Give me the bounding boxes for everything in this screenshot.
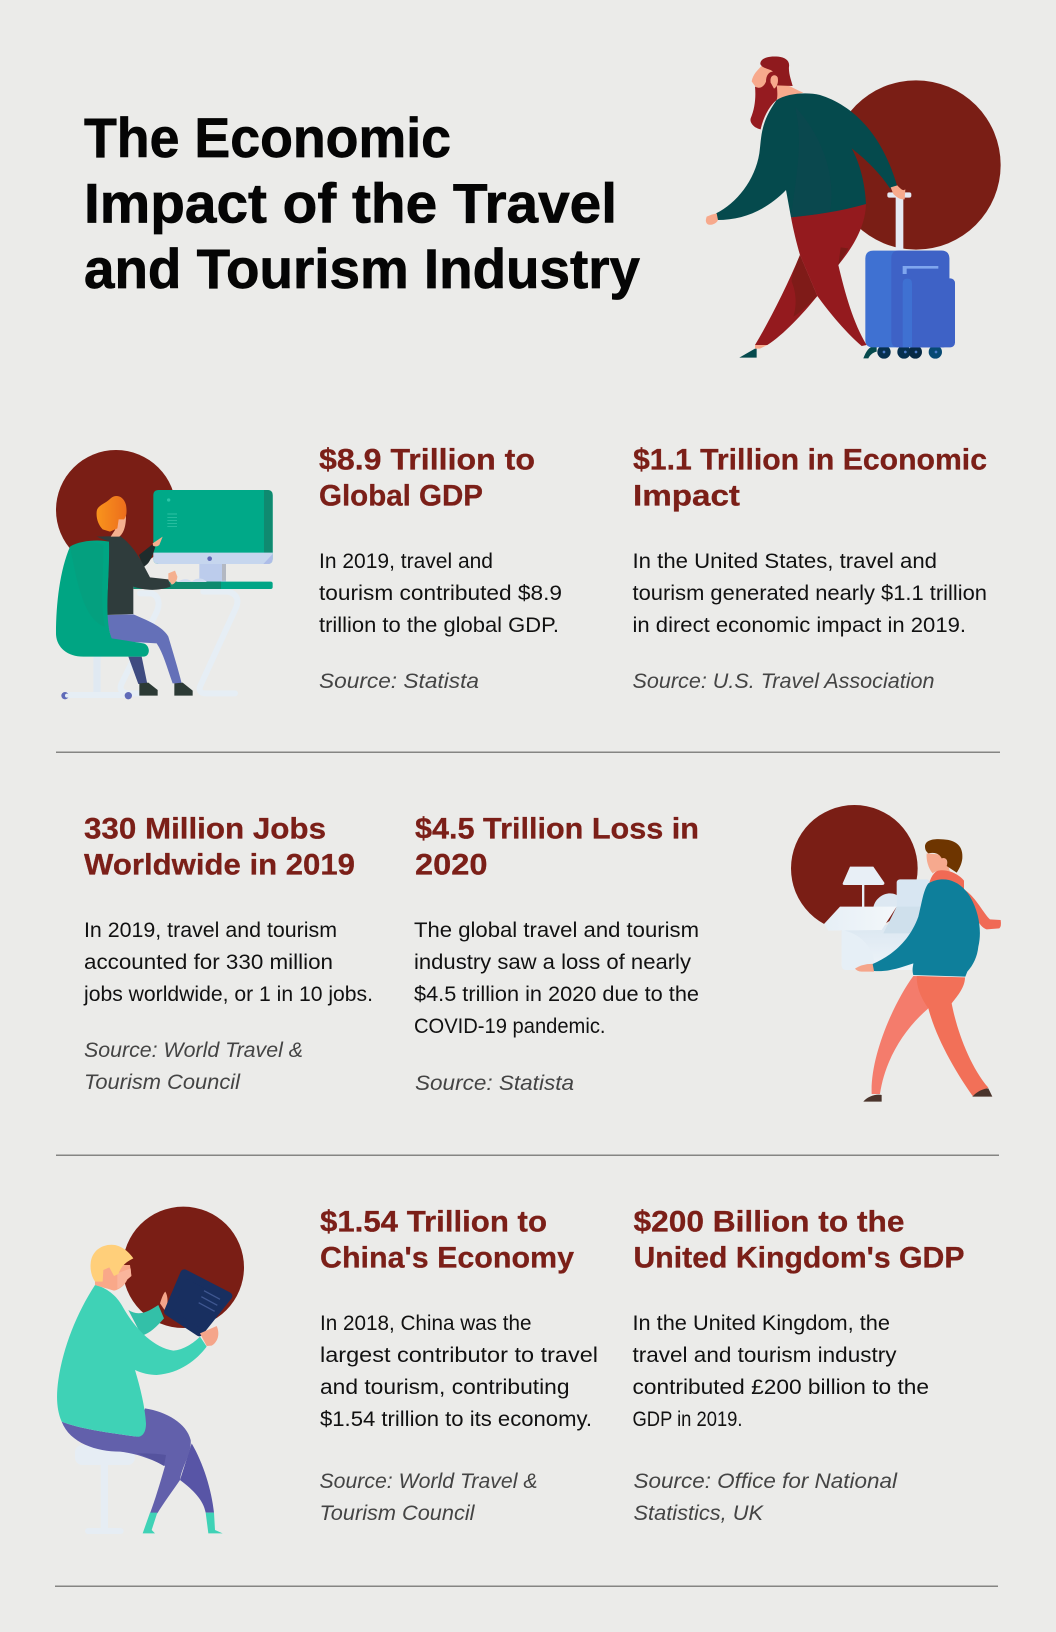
illustration: person seated with tablet [57, 1207, 244, 1534]
text block: $4.5 Trillion Loss [414, 812, 699, 1095]
text block: 330 Million Jobs: Worldwide in 2019 [84, 848, 355, 882]
text block: $8.9 Trillion [319, 444, 562, 693]
text block: $200 Billion: contributed £200 billion to the [632, 1376, 929, 1399]
text block: $1.54 Trillion: China's Economy [320, 1242, 574, 1274]
illustration: person at desktop computer [56, 450, 273, 699]
text block: 330 Million Jobs [83, 812, 373, 1094]
text block: $1.54 Trillion: Source: World Travel & [320, 1470, 538, 1493]
divider [56, 752, 1000, 753]
text block: 330 Million Jobs: In 2019, travel and tourism [84, 919, 337, 942]
text block: $200 Billion: GDP in 2019. [632, 1408, 742, 1431]
text block: $1.1 Trillion: In the United States, travel and [632, 550, 937, 573]
text block: 330 Million Jobs: 330 Million Jobs [84, 812, 326, 846]
text block: $4.5 Trillion Loss: $4.5 trillion in 2020 due to the [414, 983, 699, 1006]
text block: $8.9 Trillion: trillion to the global GDP. [319, 614, 559, 637]
text block: $1.54 Trillion: In 2018, China was the [320, 1312, 532, 1335]
text block: $1.54 Trillion: largest contributor to travel [320, 1344, 598, 1367]
text block: $1.1 Trillion [632, 444, 987, 693]
text block: $200 Billion: Source: Office for National [634, 1470, 898, 1493]
text block: $8.9 Trillion: $8.9 Trillion to [319, 444, 535, 476]
text block: $1.1 Trillion: in direct economic impact in 2019. [632, 614, 966, 637]
text block: 330 Million Jobs: jobs worldwide, or 1 in 10 jobs. [83, 983, 373, 1006]
text block: $1.1 Trillion: Source: U.S. Travel Association [632, 670, 934, 693]
text block: $1.54 Trillion: and tourism, contributing [320, 1376, 570, 1399]
text block: $200 Billion: $200 Billion to the [634, 1206, 904, 1238]
text block: $200 Billion: travel and tourism industry [632, 1344, 897, 1367]
text block: $4.5 Trillion Loss: industry saw a loss of nearly [414, 951, 692, 974]
text block: $4.5 Trillion Loss: COVID-19 pandemic. [414, 1015, 606, 1038]
text block: $200 Billion: In the United Kingdom, the [632, 1312, 890, 1335]
text block: $8.9 Trillion: Source: Statista [319, 670, 479, 693]
text block: $4.5 Trillion Loss: Source: Statista [415, 1072, 574, 1095]
text block: 330 Million Jobs: Tourism Council [84, 1071, 241, 1094]
divider [56, 1154, 999, 1156]
text block: $1.54 Trillion: $1.54 trillion to its economy. [320, 1408, 592, 1431]
text block: $4.5 Trillion Loss: The global travel and tourism [414, 919, 699, 942]
text block: $1.1 Trillion: Impact [633, 480, 740, 512]
text block: $4.5 Trillion Loss: 2020 [415, 848, 488, 882]
divider [55, 1586, 998, 1587]
text block: $1.54 Trillion [320, 1206, 598, 1525]
text block: $200 Billion: United Kingdom's GDP [634, 1242, 964, 1274]
title: and Tourism Industry [84, 237, 640, 300]
text block: $1.54 Trillion: $1.54 Trillion to [320, 1206, 547, 1238]
text block: $8.9 Trillion: Global GDP [319, 480, 483, 512]
text block: $4.5 Trillion Loss: $4.5 Trillion Loss in [415, 812, 699, 846]
text block: $1.54 Trillion: Tourism Council [320, 1502, 476, 1525]
text block: $200 Billion [632, 1206, 964, 1525]
title [84, 106, 640, 300]
text block: $8.9 Trillion: In 2019, travel and [319, 550, 493, 573]
text block: $8.9 Trillion: tourism contributed $8.9 [319, 582, 562, 605]
title: The Economic [84, 106, 451, 169]
text block: $1.1 Trillion: tourism generated nearly $1.1 trillion [632, 582, 987, 605]
illustration: person carrying moving box [791, 805, 1001, 1102]
illustration: traveller with suitcase [706, 56, 1001, 359]
text block: $1.1 Trillion: $1.1 Trillion in Economic [633, 444, 987, 476]
text block: 330 Million Jobs: accounted for 330 million [84, 951, 333, 974]
text block: 330 Million Jobs: Source: World Travel & [84, 1039, 303, 1062]
text block: $200 Billion: Statistics, UK [634, 1502, 764, 1525]
title: Impact of the Travel [84, 172, 617, 234]
